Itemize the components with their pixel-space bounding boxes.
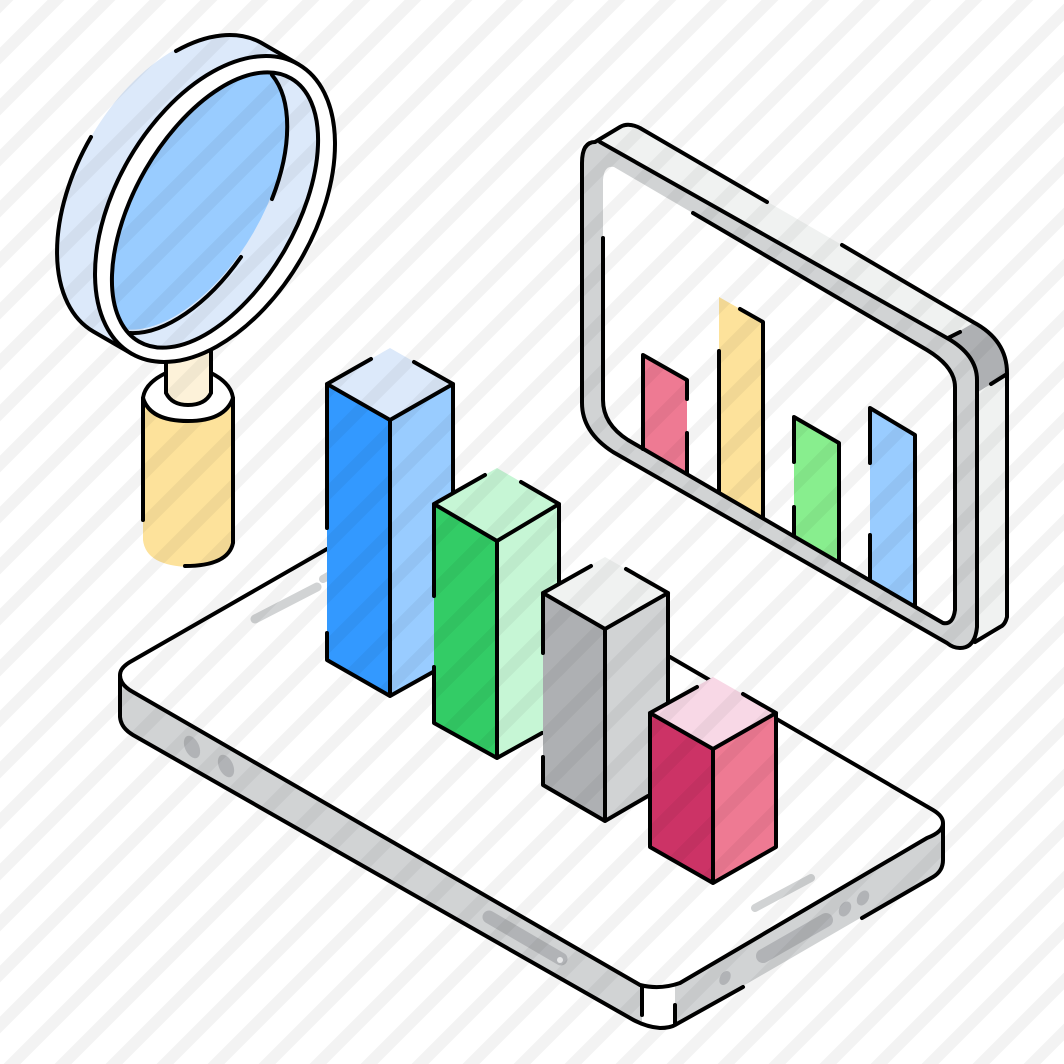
frame depth faces <box>593 125 1007 642</box>
magnifier handle grip <box>143 398 233 567</box>
3D bar: green <box>434 468 559 758</box>
magnifier glass <box>114 74 286 330</box>
magnifier rim back outline <box>57 35 299 354</box>
phone right side port and dots <box>717 888 872 987</box>
frame front face <box>582 142 977 648</box>
screen bar: green <box>794 417 839 562</box>
phone side faces <box>120 675 943 1028</box>
magnifier inner rim <box>69 38 361 382</box>
magnifier ring <box>45 15 385 403</box>
phone outlines <box>120 549 943 1028</box>
screen bar: pink <box>643 355 687 474</box>
frame screen <box>603 167 955 623</box>
frame dark corner <box>948 322 1007 392</box>
phone left side buttons <box>181 733 237 780</box>
phone top face <box>120 506 943 987</box>
bar chart: isometric 3D bars <box>327 348 776 883</box>
magnifier rim depth <box>7 0 347 381</box>
phone corner bumper <box>642 985 675 1027</box>
magnifier handle collar <box>143 373 233 421</box>
frame outlines <box>582 125 1007 648</box>
magnifier inner rim outline <box>69 38 361 382</box>
3D bar: crimson <box>650 677 776 883</box>
magnifier glass back edges <box>130 75 287 333</box>
icon: magnifying glass <box>55 33 337 568</box>
screen bar: yellow <box>719 297 763 518</box>
phone screen highlights <box>255 575 811 908</box>
panel: smartphone base <box>120 506 943 1028</box>
phone left side speaker slot <box>489 917 563 963</box>
3D bar: grey <box>543 557 668 821</box>
magnifier neck <box>166 345 211 405</box>
3D bar: blue <box>327 348 453 696</box>
panel: floating chart frame <box>582 125 1007 648</box>
screen bar: blue <box>870 408 915 606</box>
